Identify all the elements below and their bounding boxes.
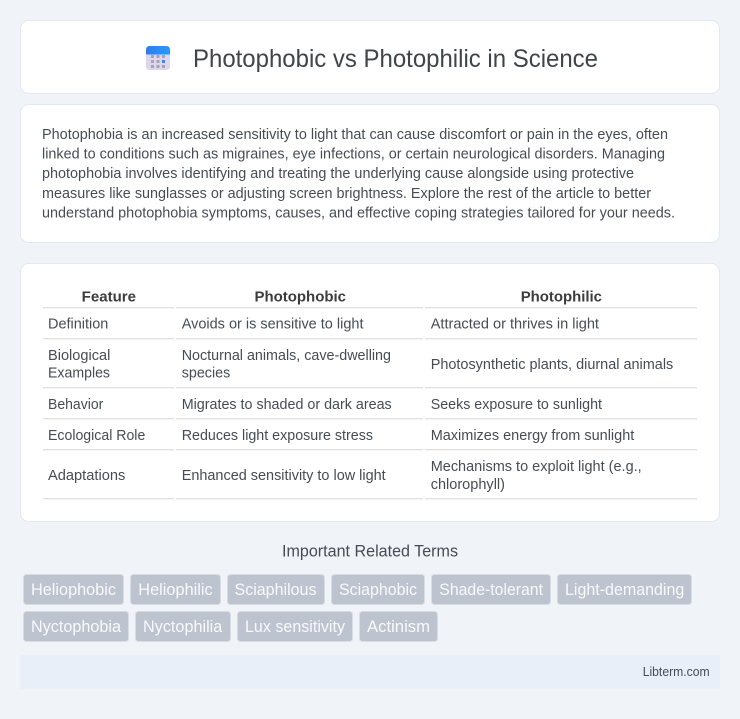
footer bar: Libterm.com [643,665,710,679]
row: definition: Avoids or is sensitive to light [182,317,364,333]
row: definition [48,317,599,333]
intro paragraph: Photophobia is an increased sensitivity to light that can cause discomfort or pain in the eyes, often [42,127,668,143]
icon: calendar [146,46,170,70]
row: ecological role: Ecological Role [48,428,145,444]
table header row: Photophobic [254,289,346,306]
row: behavior: Behavior [48,397,103,413]
row: adaptations: Mechanisms to exploit light (e.g., [431,459,642,475]
intro paragraph: linked to conditions such as migraines, eye infections, or certain neurological disorders. Managing [42,147,665,163]
related term tags: Shade-tolerant [439,580,543,599]
related term tags: Heliophilic [138,580,213,599]
intro paragraph: measures like sunglasses or adjusting screen brightness. Explore the rest of the article to better [42,186,651,202]
intro paragraph: photophobia involves identifying and treating the underlying cause alongside using protective [42,166,634,182]
row: ecological role [48,428,634,444]
related term tags: Sciaphobic [339,580,417,599]
row: adaptations: Adaptations [48,468,125,484]
row: biological examples: Nocturnal animals, cave-dwelling [182,348,391,364]
related term tags: Sciaphilous [234,580,316,599]
title: Photophobic vs Photophilic in Science [193,46,598,73]
panel: title header [20,20,720,94]
row: biological examples: Examples [48,366,110,382]
related term tags: Lux sensitivity [245,617,346,636]
related term tags: Nyctophobia [31,617,122,636]
row: ecological role: Reduces light exposure stress [182,428,373,444]
table header row [82,289,602,306]
row: biological examples: Photosynthetic plants, diurnal animals [431,357,673,373]
intro paragraph: understand photophobia symptoms, causes, and effective coping strategies tailored for your needs. [42,205,675,221]
related term tags: Heliophobic [31,580,116,599]
footer bar [20,655,720,689]
row: behavior: Seeks exposure to sunlight [431,397,602,413]
row: behavior [48,397,602,413]
heading: important related terms: Important Related Terms [282,542,458,561]
row: definition: Attracted or thrives in light [431,317,599,333]
row: biological examples [48,348,673,382]
row: behavior: Migrates to shaded or dark areas [182,397,392,413]
related term tags: Actinism [367,617,430,636]
panel: comparison table [20,264,720,522]
row: biological examples: species [182,366,230,382]
related term tags [24,574,692,642]
row: definition: Definition [48,317,108,333]
table header row: Photophilic [521,289,602,306]
row: adaptations: chlorophyll) [431,477,505,493]
row: adaptations [48,459,642,493]
panel: introduction [20,104,720,242]
related term tags: Light-demanding [565,580,684,599]
row: biological examples: Biological [48,348,110,364]
table header row: Feature [82,289,136,306]
intro paragraph [42,127,675,221]
related term tags: Nyctophilia [143,617,223,636]
row: adaptations: Enhanced sensitivity to low light [182,468,386,484]
row: ecological role: Maximizes energy from sunlight [431,428,634,444]
